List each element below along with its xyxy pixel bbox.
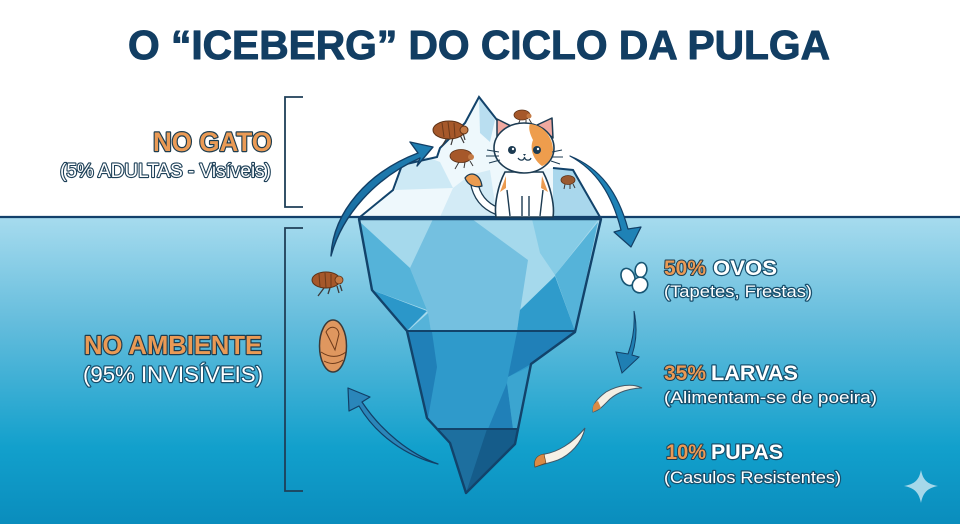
- bracket: no gato: [285, 97, 303, 207]
- iceberg above water: [360, 97, 600, 217]
- label: ovos: (Tapetes, Frestas): [664, 282, 812, 301]
- icon: sparkle: [904, 470, 938, 503]
- label: pupas: (Casulos Resistentes): [664, 468, 841, 487]
- label: ovos: 50%: [664, 257, 706, 280]
- bracket: no ambiente: [285, 228, 303, 491]
- icon: flea middle: [450, 150, 474, 169]
- cat ears: [497, 118, 553, 138]
- icon: adult flea: [312, 272, 343, 296]
- arrow: environment up to cat: [331, 142, 433, 256]
- icon: pupa cocoon: [320, 320, 346, 372]
- title: O “ICEBERG” DO CICLO DA PULGA: [128, 22, 830, 68]
- icon: flea top: [514, 110, 532, 125]
- icon: flea right: [561, 176, 575, 189]
- background water: [0, 218, 960, 524]
- icon: cat: [465, 118, 563, 217]
- label: larvas: 35%: [664, 362, 706, 385]
- label: pupas: [664, 441, 841, 487]
- label: pupas: PUPAS: [711, 441, 783, 464]
- label: no gato: NO GATO: [153, 127, 272, 157]
- cat tail: [474, 182, 497, 211]
- icon: larva lower: [534, 428, 585, 467]
- cat body: [495, 172, 553, 217]
- label: pupas: 10%: [666, 441, 706, 464]
- label: ovos: OVOS: [713, 257, 777, 280]
- label: no ambiente: (95% INVISÍVEIS): [83, 362, 263, 387]
- cat head: [494, 123, 554, 173]
- waterline: [0, 216, 960, 218]
- label: ovos: [664, 257, 812, 301]
- label: larvas: (Alimentam-se de poeira): [664, 388, 877, 407]
- arrow: pupae to adults: [348, 388, 438, 464]
- icon: flea on iceberg peak: [433, 121, 468, 146]
- icon: eggs: [618, 262, 651, 296]
- label: no ambiente: [83, 330, 263, 387]
- icon: larva upper: [593, 385, 642, 412]
- iceberg below water: [359, 219, 601, 493]
- label: larvas: LARVAS: [711, 362, 798, 385]
- label: no ambiente: NO AMBIENTE: [84, 330, 262, 360]
- arrow: cat to eggs: [570, 156, 641, 247]
- label: no gato: (5% ADULTAS - Visíveis): [60, 161, 271, 182]
- arrow: eggs to larvae: [616, 311, 639, 373]
- label: no gato: [60, 127, 272, 182]
- cat face: [508, 146, 516, 154]
- label: larvas: [664, 362, 877, 407]
